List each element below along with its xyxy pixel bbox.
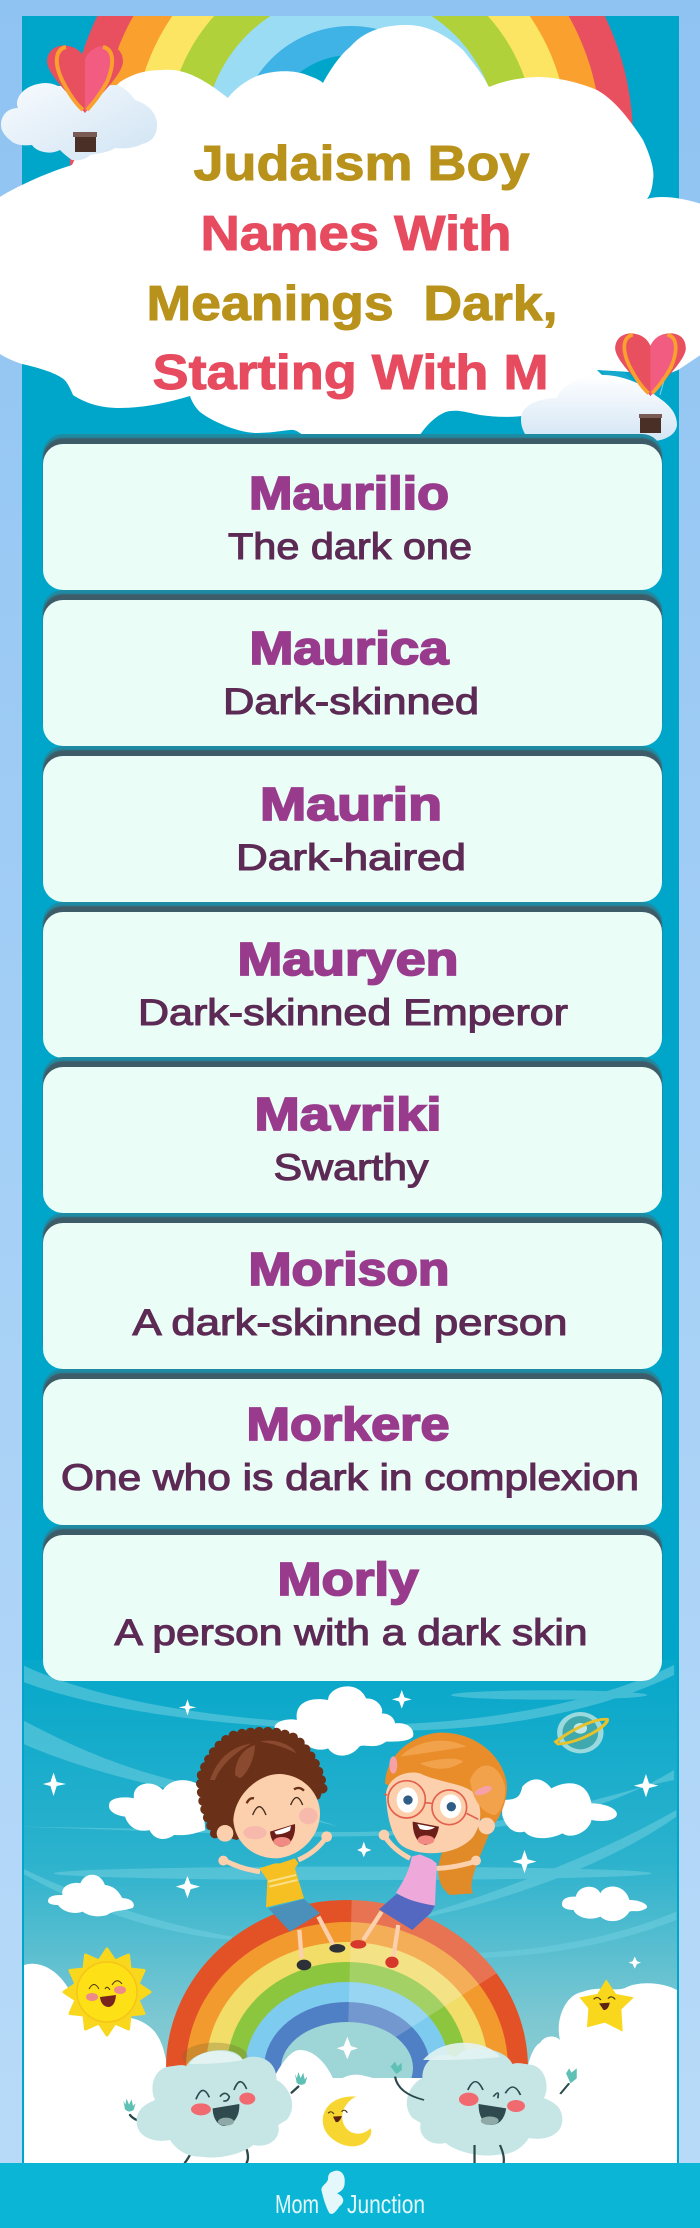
panel: card 6 Morison: Morison — [248, 1243, 450, 1295]
panel: card 7 Morkere — [43, 1369, 662, 1525]
title: Meanings Dark, — [146, 277, 558, 331]
star character — [579, 1979, 634, 2032]
panel: card 3 Maurin: Dark-haired — [236, 837, 466, 878]
panel: card 8 Morly: A person with a dark skin — [114, 1612, 588, 1653]
planet — [556, 1712, 607, 1753]
right balloon on cloud — [521, 333, 686, 441]
panel: card 2 Maurica: Maurica — [250, 622, 449, 674]
panel: card 3 Maurin: Maurin — [260, 778, 442, 830]
centre white cloud mound — [270, 2050, 440, 2163]
panel: card 5 Mavriki — [43, 1057, 662, 1213]
panel: card 3 Maurin — [43, 746, 662, 902]
cloud: small left — [48, 1875, 134, 1916]
MomJunction logo: Mom — [275, 2189, 319, 2219]
cloud: small right — [562, 1886, 647, 1921]
lower sky scene — [22, 1660, 677, 2163]
lower white clouds — [24, 1964, 677, 2163]
panel: card 7 Morkere: Morkere — [246, 1398, 450, 1450]
panel: card 2 Maurica: Dark-skinned — [223, 681, 479, 722]
footer bar — [0, 2163, 700, 2228]
boy — [200, 1731, 345, 1970]
upper sky clouds and stars — [43, 1686, 658, 2059]
header cloud — [0, 25, 700, 440]
MomJunction logo: Junction — [347, 2189, 425, 2219]
panel: card 7 Morkere: One who is dark in complexion — [61, 1457, 639, 1498]
header rainbow — [70, 16, 633, 166]
cloud: left — [109, 1780, 205, 1839]
sun character — [64, 1949, 150, 2035]
title: Judaism Boy — [194, 137, 530, 191]
panel: card 1 Maurilio: The dark one — [228, 526, 472, 567]
big rainbow — [166, 1900, 528, 2078]
panel: card 2 Maurica — [43, 590, 662, 746]
panel: card 5 Mavriki: Mavriki — [254, 1088, 442, 1140]
panel: card 5 Mavriki: Swarthy — [274, 1147, 429, 1188]
panel: card 8 Morly — [43, 1525, 662, 1681]
stars — [43, 1690, 658, 2059]
MomJunction logo — [275, 2171, 425, 2219]
title — [146, 137, 558, 400]
cloud character: right — [391, 2043, 577, 2164]
panel: card 1 Maurilio — [43, 434, 662, 590]
left balloon on cloud — [1, 46, 157, 160]
panel: card 6 Morison: A dark-skinned person — [132, 1302, 568, 1343]
panel: card 4 Mauryen: Dark-skinned Emperor — [138, 992, 568, 1033]
panel: card 4 Mauryen: Mauryen — [238, 933, 458, 985]
panel: card 8 Morly: Morly — [278, 1553, 419, 1605]
cloud: top centre — [275, 1686, 413, 1756]
cloud character: left — [123, 2043, 307, 2163]
cloud: right — [502, 1779, 617, 1838]
panel: card 4 Mauryen — [43, 902, 662, 1058]
moon character — [323, 2097, 371, 2146]
panel: card 6 Morison — [43, 1213, 662, 1369]
panel: card 1 Maurilio: Maurilio — [249, 467, 449, 519]
girl — [350, 1733, 507, 1968]
title: Starting With M — [152, 346, 548, 400]
title: Names With — [200, 207, 512, 261]
